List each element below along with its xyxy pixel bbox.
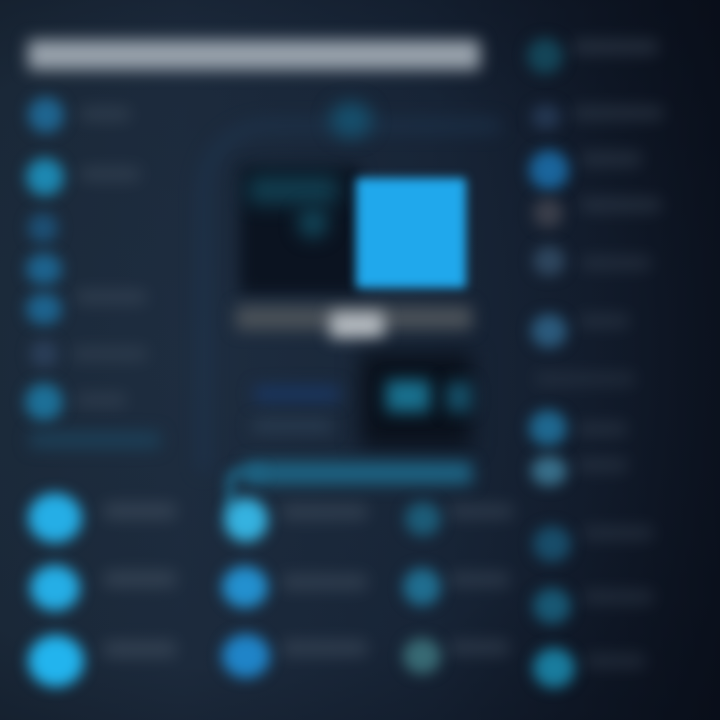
chart: teal block xyxy=(386,380,430,412)
chart: teal block small xyxy=(446,382,472,412)
icon: marker 2 xyxy=(531,104,561,130)
text: row 2 xyxy=(573,106,663,120)
icon: right circle 2 xyxy=(403,568,441,606)
icon: top marker xyxy=(330,102,372,138)
text: row 1 xyxy=(573,40,658,54)
icon: marker 8 xyxy=(529,410,567,446)
icon: bottom circle 3 xyxy=(28,635,84,687)
text: row 2 xyxy=(104,571,176,587)
icon: marker 12 xyxy=(533,648,575,688)
text: row 3 xyxy=(104,641,176,657)
text: row 2 xyxy=(282,574,367,590)
icon: marker 4 xyxy=(533,198,563,228)
icon: list marker 6 xyxy=(30,340,58,368)
icon: right circle 3 xyxy=(403,638,441,674)
panel: bottom left column xyxy=(18,483,174,698)
text: row 6 xyxy=(579,314,629,328)
title xyxy=(28,40,480,70)
text: lower left bars xyxy=(254,386,340,402)
text: row 12 xyxy=(585,654,645,668)
icon: middle circle 1 xyxy=(224,498,268,542)
panel: left list xyxy=(18,90,160,452)
text: list row 7 xyxy=(76,393,126,407)
text: row 10 xyxy=(583,526,653,540)
text: caption highlight xyxy=(330,312,384,338)
text: list row 8 xyxy=(30,432,160,448)
icon: marker 9 xyxy=(531,456,567,486)
text: row 5 xyxy=(581,256,651,270)
text: row 9 xyxy=(577,458,627,472)
text: row 7 xyxy=(535,372,635,386)
icon: middle circle 2 xyxy=(222,566,268,608)
chart: dark screen glow xyxy=(248,176,338,204)
icon: list marker 2 xyxy=(26,158,64,196)
icon: marker 5 xyxy=(533,246,565,276)
icon: marker 11 xyxy=(533,588,571,624)
arrow: connector to bottom row xyxy=(226,468,265,513)
icon: marker 6 xyxy=(531,314,567,348)
text: list row 1 xyxy=(80,107,130,121)
icon: list marker 1 xyxy=(28,97,64,133)
text: row 11 xyxy=(583,590,653,604)
panel: right list xyxy=(520,33,662,697)
text: row 2 xyxy=(449,572,509,587)
icon: list marker 5 xyxy=(26,293,62,325)
text: caption bar xyxy=(236,306,472,330)
icon: list marker 7 xyxy=(25,383,63,421)
panel: central dashboard xyxy=(230,95,492,494)
arc outline xyxy=(198,120,500,472)
icon: list marker 3 xyxy=(28,213,58,243)
chart: bright blue block xyxy=(356,178,466,288)
text: list row 5 xyxy=(76,290,146,304)
icon: marker 1 xyxy=(527,38,563,74)
panel: bottom right column xyxy=(396,496,511,681)
icon: list marker 4 xyxy=(26,253,62,285)
icon: middle circle 3 xyxy=(222,634,270,678)
text: row 3 xyxy=(282,640,367,656)
connector bar xyxy=(244,462,472,484)
text: row 3 xyxy=(581,152,641,166)
icon: bottom circle 1 xyxy=(28,493,82,543)
text: lower left bar xyxy=(252,420,332,432)
icon: right circle 1 xyxy=(405,502,441,536)
text: row 3 xyxy=(449,640,509,655)
text: list row 6 xyxy=(72,347,147,361)
icon: marker 3 xyxy=(529,150,569,190)
text: row 8 xyxy=(577,422,627,436)
icon: marker 10 xyxy=(533,526,571,562)
panel: lower dark screen xyxy=(360,352,472,448)
text: row 1 xyxy=(104,503,176,519)
text: row 4 xyxy=(581,198,661,212)
panel: bottom middle column xyxy=(212,488,366,688)
chart: dark screen xyxy=(240,166,360,294)
text: row 1 xyxy=(282,504,367,520)
text: row 1 xyxy=(449,504,513,519)
chart: small teal accent xyxy=(298,208,328,238)
text: list row 2 xyxy=(80,167,140,181)
icon: bottom circle 2 xyxy=(30,565,80,611)
